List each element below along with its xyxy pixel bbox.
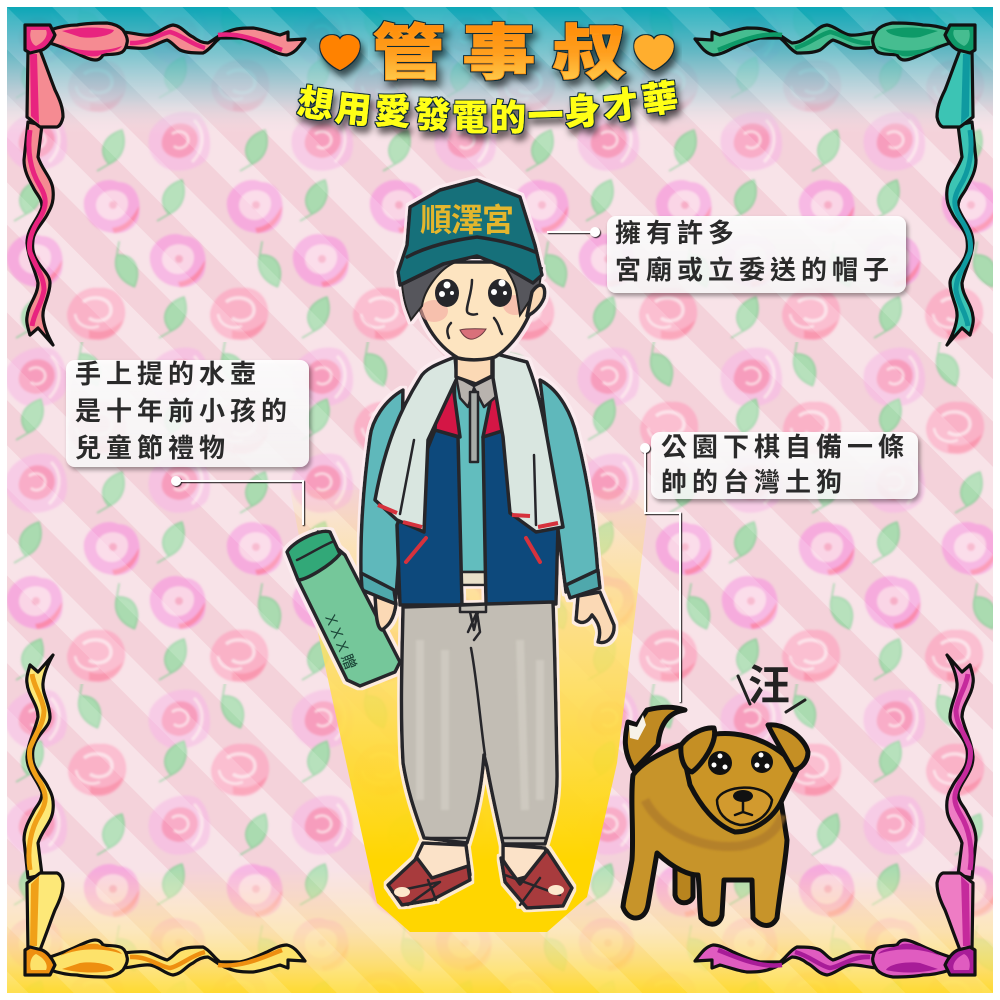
collar and placket	[456, 376, 498, 407]
ribbon: bottom right	[695, 655, 976, 977]
callout: hat: 宮廟或立委送的帽子	[615, 255, 894, 285]
dog neck shading	[645, 800, 782, 847]
eyes	[435, 279, 459, 307]
bark text	[738, 662, 805, 712]
ribbon: top right	[695, 23, 976, 345]
cuffs	[361, 570, 600, 604]
icon: left heart	[320, 35, 360, 70]
connector: dog	[640, 443, 680, 702]
shirt	[455, 375, 492, 572]
dog body	[623, 745, 787, 926]
dog tail	[625, 707, 685, 770]
hair	[402, 252, 542, 320]
cap	[398, 180, 542, 285]
dog eyes	[708, 751, 773, 775]
callout: dog: 帥的台灣土狗	[661, 467, 847, 497]
callout: dog	[651, 432, 918, 499]
subtitle: 想用愛發電的一身才華	[295, 76, 681, 138]
callout: hat	[607, 216, 906, 293]
hands	[375, 596, 396, 630]
callout: hat: 擁有許多	[615, 218, 739, 248]
neck	[456, 355, 492, 384]
character: uncle	[287, 180, 614, 908]
dog muzzle	[717, 788, 772, 825]
jacket panels	[397, 430, 462, 605]
towel	[375, 357, 457, 532]
title: 管事叔	[372, 20, 626, 87]
dog head	[682, 734, 798, 832]
ribbon: bottom left	[24, 655, 305, 977]
mouth	[460, 329, 486, 339]
bottle text: XXX贈	[321, 612, 359, 672]
face	[416, 262, 538, 360]
connector: hat	[547, 227, 600, 237]
feet	[415, 843, 470, 885]
nose and wrinkles	[447, 280, 502, 338]
spotlight	[290, 490, 650, 932]
bottle	[298, 532, 400, 686]
dog ears	[681, 728, 715, 772]
dog hind leg	[675, 860, 693, 903]
cap text: 順澤宮	[420, 202, 514, 238]
sandals	[388, 858, 470, 905]
belt	[460, 572, 486, 585]
trousers	[401, 602, 557, 844]
callout: bottle: 兒童節禮物	[75, 433, 230, 463]
ribbon: top left	[24, 23, 305, 345]
bark text: 汪	[748, 662, 790, 709]
sleeves	[361, 380, 598, 598]
ear	[527, 285, 545, 316]
icon: right heart	[634, 35, 674, 70]
callout: bottle: 是十年前小孩的	[75, 396, 292, 426]
callout: bottle: 手上提的水壺	[75, 359, 261, 389]
dog	[623, 707, 808, 926]
connector: bottle	[171, 476, 303, 525]
callout: dog: 公園下棋自備一條	[661, 432, 909, 462]
callout: bottle	[66, 359, 309, 467]
